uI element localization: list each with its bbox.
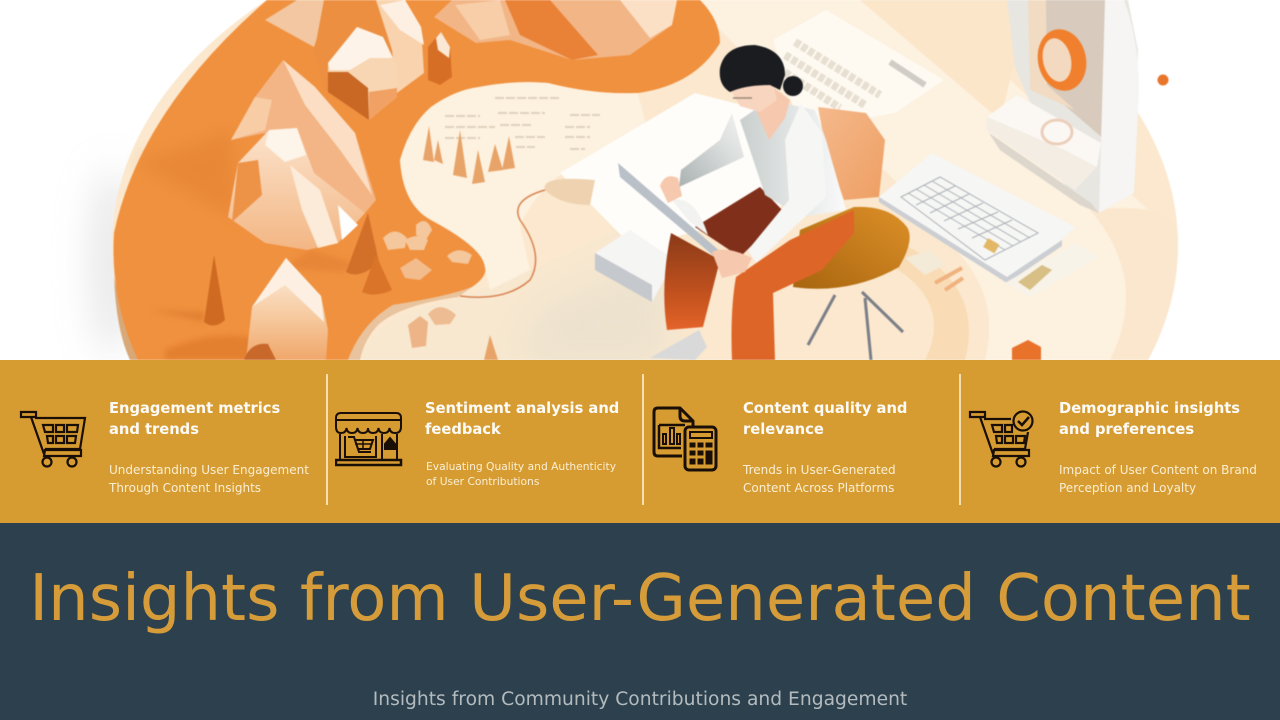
cable	[460, 190, 545, 297]
heading	[1059, 400, 1240, 438]
hero illustration	[84, 0, 1178, 360]
icon: shopping cart	[20, 410, 86, 468]
face and neck	[757, 85, 790, 140]
heading: Content quality and	[743, 400, 907, 416]
small trees	[423, 126, 515, 184]
monitor stand	[987, 0, 1168, 213]
torso	[740, 100, 846, 217]
person	[618, 45, 885, 360]
book	[618, 163, 722, 257]
heading	[743, 400, 907, 438]
disc	[112, 0, 1178, 593]
description: Understanding User Engagement	[109, 463, 309, 477]
orange ground	[114, 0, 720, 360]
description: Content Across Platforms	[743, 481, 894, 495]
heading: and preferences	[1059, 420, 1194, 438]
pale rock bottom	[244, 258, 328, 360]
rock cast shadows	[135, 128, 240, 220]
description: Perception and Loyalty	[1059, 481, 1196, 495]
divider	[642, 374, 644, 505]
heading: feedback	[425, 420, 501, 438]
icon: cart with check	[968, 410, 1034, 468]
soft disc shadow	[90, 167, 134, 357]
hair	[720, 45, 785, 92]
beige floor areas	[529, 0, 1147, 360]
heading: Demographic insights	[1059, 400, 1240, 416]
icon: report and calculator	[652, 406, 718, 472]
hands	[660, 176, 682, 203]
gold feature band	[0, 360, 1280, 523]
desk papers	[545, 10, 944, 302]
heading: relevance	[743, 420, 824, 438]
panel: demographic insights	[968, 400, 1257, 495]
trousers	[664, 233, 720, 330]
description	[426, 460, 616, 488]
heading: Sentiment analysis and	[425, 400, 619, 416]
description: Impact of User Content on Brand	[1059, 463, 1257, 477]
heading	[425, 400, 619, 438]
description: Evaluating Quality and Authenticity	[426, 460, 616, 473]
heading	[109, 400, 280, 438]
description: of User Contributions	[426, 475, 539, 488]
tall spikes and small stones	[204, 213, 498, 360]
description: Through Content Insights	[109, 481, 261, 495]
divider	[326, 374, 328, 505]
description	[1059, 463, 1257, 495]
rock formations top	[265, 0, 677, 120]
backpack	[818, 107, 885, 200]
large rock	[228, 60, 376, 250]
description	[742, 463, 896, 495]
divider	[959, 374, 961, 505]
cream inset with map text	[400, 82, 650, 290]
keyboard	[879, 153, 1099, 297]
title: Insights from User-Generated Content	[29, 562, 1251, 636]
description	[108, 463, 309, 495]
stool and orange block	[793, 207, 1041, 360]
icon: storefront	[335, 412, 402, 466]
subtitle: Insights from Community Contributions and Engagement	[373, 689, 907, 710]
panel: sentiment analysis	[335, 400, 619, 488]
title panel	[0, 523, 1280, 720]
panel: engagement metrics	[20, 400, 309, 495]
heading: and trends	[109, 420, 199, 438]
description: Trends in User-Generated	[743, 463, 896, 477]
heading: Engagement metrics	[109, 400, 280, 416]
panel: content quality	[652, 400, 907, 495]
